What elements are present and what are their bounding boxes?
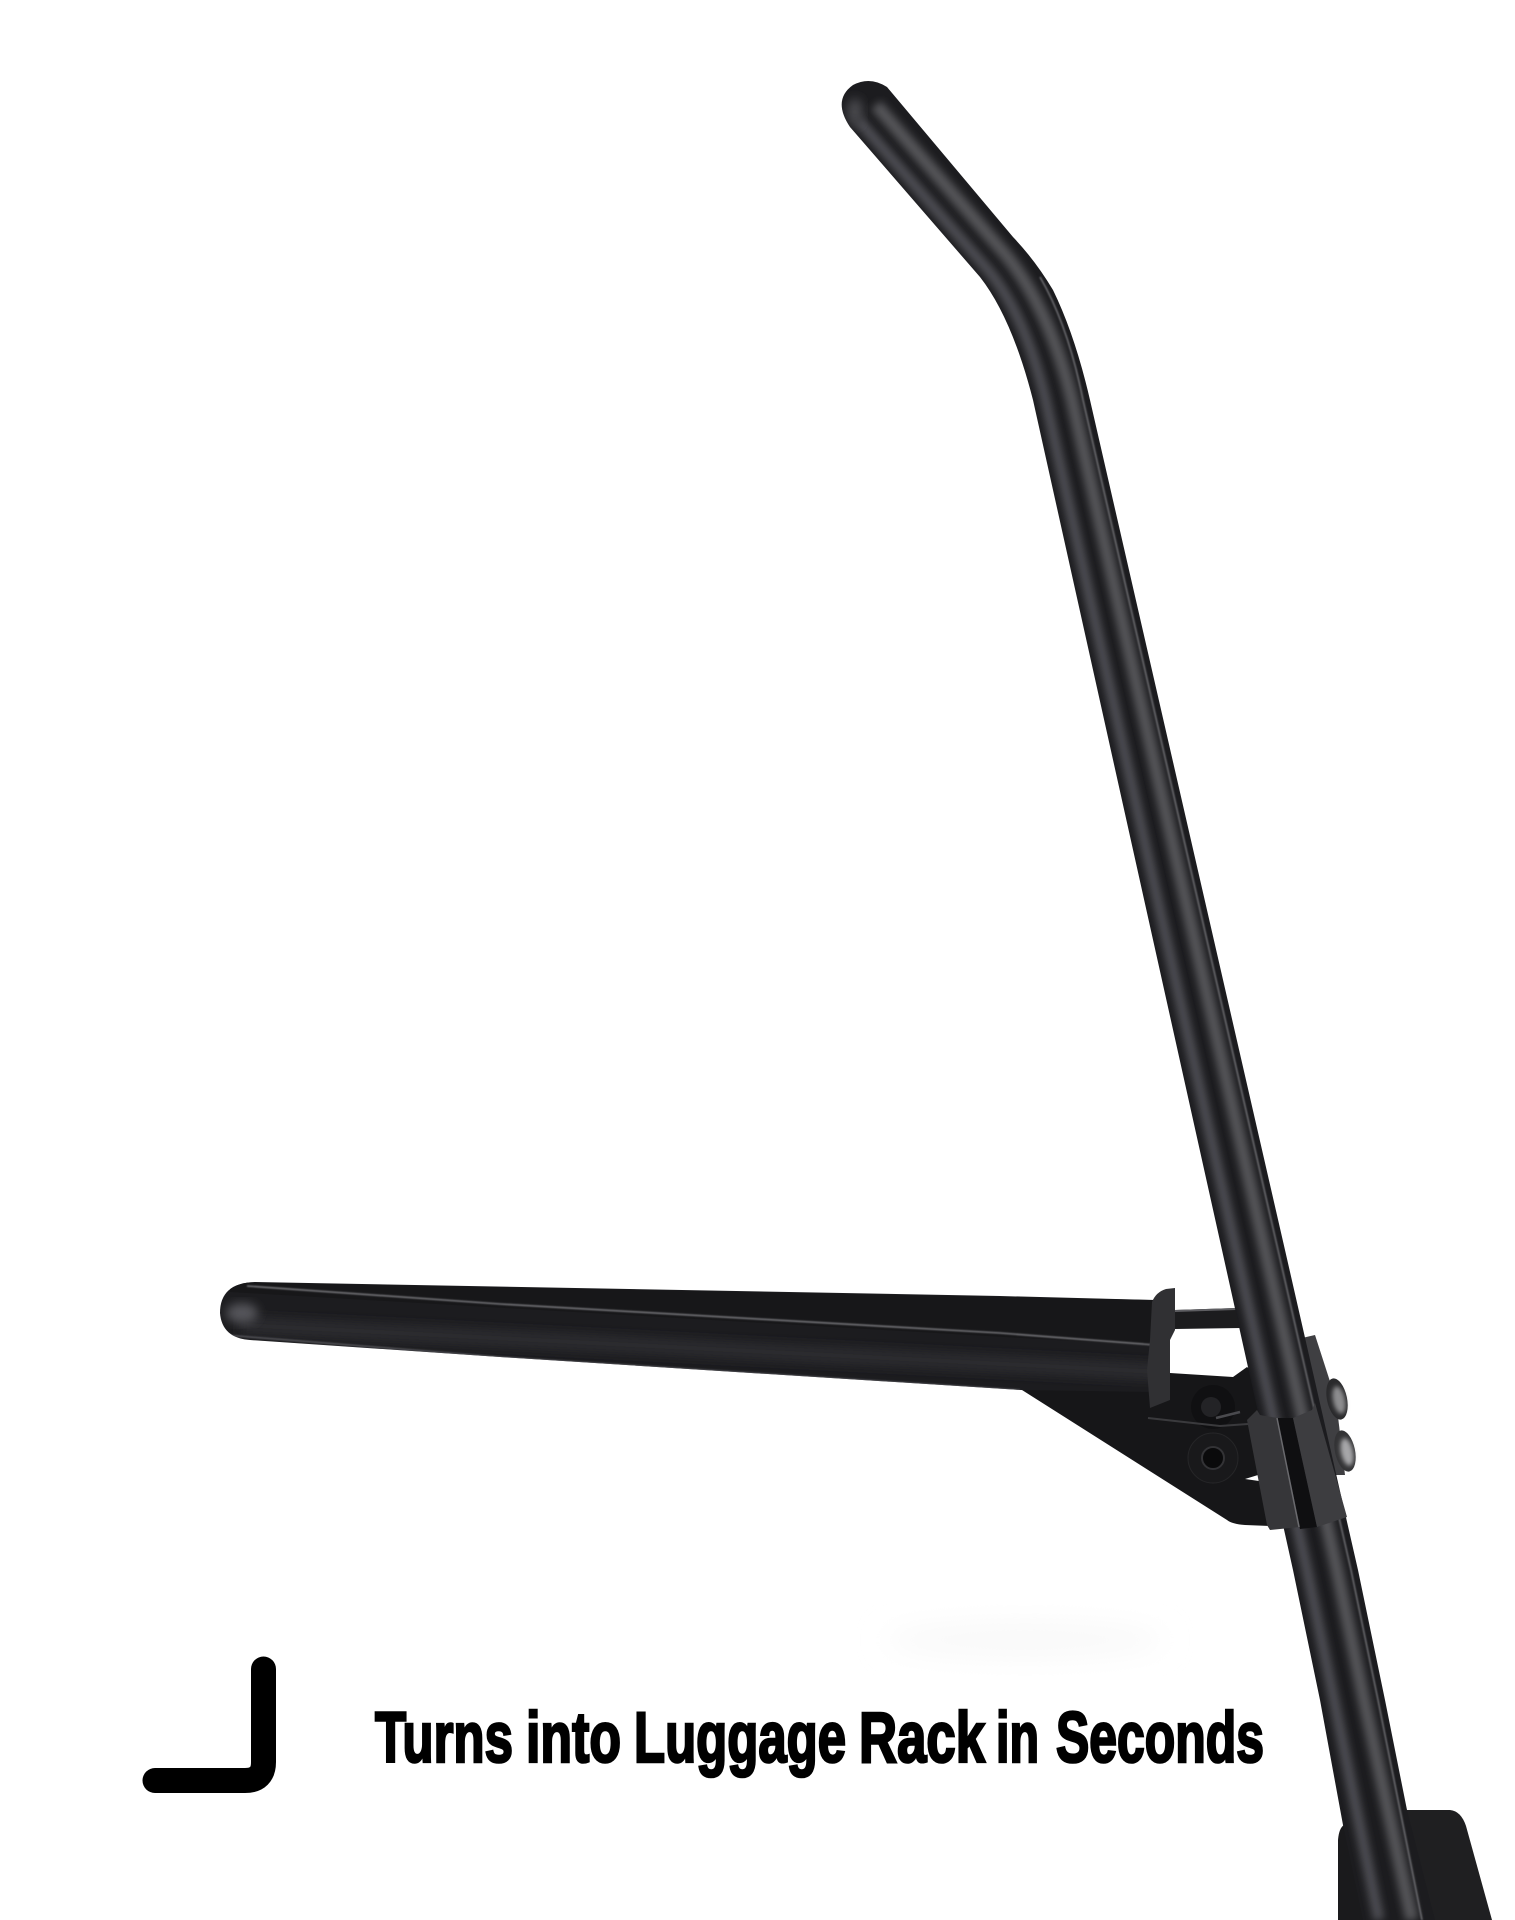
crossbar — [1175, 1308, 1241, 1329]
caption: Rack — [859, 1699, 985, 1778]
bolt lower — [1331, 1428, 1359, 1474]
caption: Luggage — [634, 1699, 846, 1778]
main handle tube — [842, 81, 1424, 1920]
bolt upper — [1323, 1376, 1351, 1422]
base plate — [1338, 1810, 1492, 1920]
caption: in — [996, 1699, 1039, 1778]
gusset gap — [1245, 1475, 1259, 1481]
pole clamp — [1247, 1403, 1347, 1530]
caption: Turns — [375, 1699, 513, 1778]
caption: into — [526, 1699, 621, 1778]
caption: Seconds — [1056, 1699, 1264, 1778]
luggage rack arm — [200, 1270, 1290, 1526]
lower screw hole — [1188, 1433, 1238, 1483]
upper hinge hole — [1148, 1385, 1248, 1429]
tube edge sheen — [1040, 277, 1422, 1920]
tube tip highlight — [847, 98, 863, 126]
rack bracket — [1147, 1288, 1175, 1408]
floor shadow — [885, 1624, 1165, 1656]
tube right highlight band — [876, 105, 1412, 1920]
tube left highlight band — [858, 120, 1379, 1920]
caption — [375, 1699, 1264, 1778]
rack tube — [220, 1282, 1153, 1390]
rear bracket and bolts — [1302, 1335, 1359, 1475]
corner icon — [155, 1669, 264, 1780]
rack gusset plate — [1015, 1367, 1290, 1526]
